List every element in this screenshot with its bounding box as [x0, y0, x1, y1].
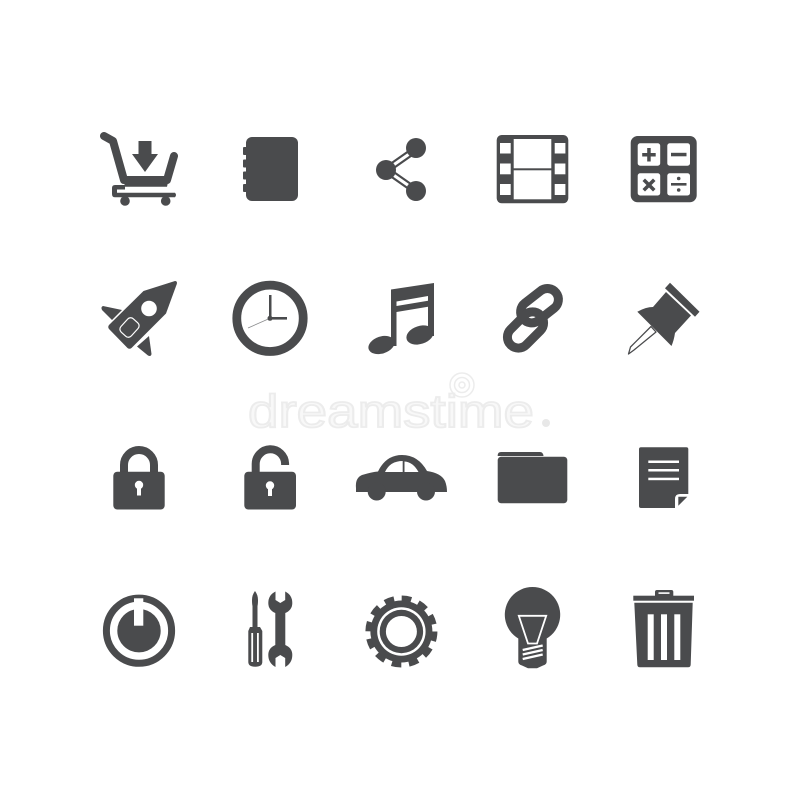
icon: rocket	[101, 281, 177, 356]
icon: music notes	[366, 283, 436, 357]
icon: power button	[106, 598, 172, 663]
icon: clock	[237, 285, 303, 351]
icon: share	[376, 138, 426, 201]
icon: notebook	[243, 137, 298, 201]
icon: folder	[498, 452, 567, 503]
icon: gear	[369, 599, 434, 664]
icon: car	[356, 455, 447, 500]
icon: trash can	[633, 590, 694, 667]
icon: tools	[248, 591, 292, 667]
watermark: dreamstime	[248, 385, 534, 437]
icon: film strip	[497, 135, 568, 203]
icon: calculator	[631, 136, 697, 202]
icon: light bulb	[505, 587, 560, 668]
icon: shopping cart	[104, 136, 176, 206]
icon: closed padlock	[113, 450, 165, 510]
watermark	[248, 373, 550, 437]
icon: open padlock	[244, 449, 296, 510]
icon: document	[639, 447, 689, 509]
icon: push pin	[628, 283, 700, 354]
icon: chain link	[503, 284, 563, 353]
